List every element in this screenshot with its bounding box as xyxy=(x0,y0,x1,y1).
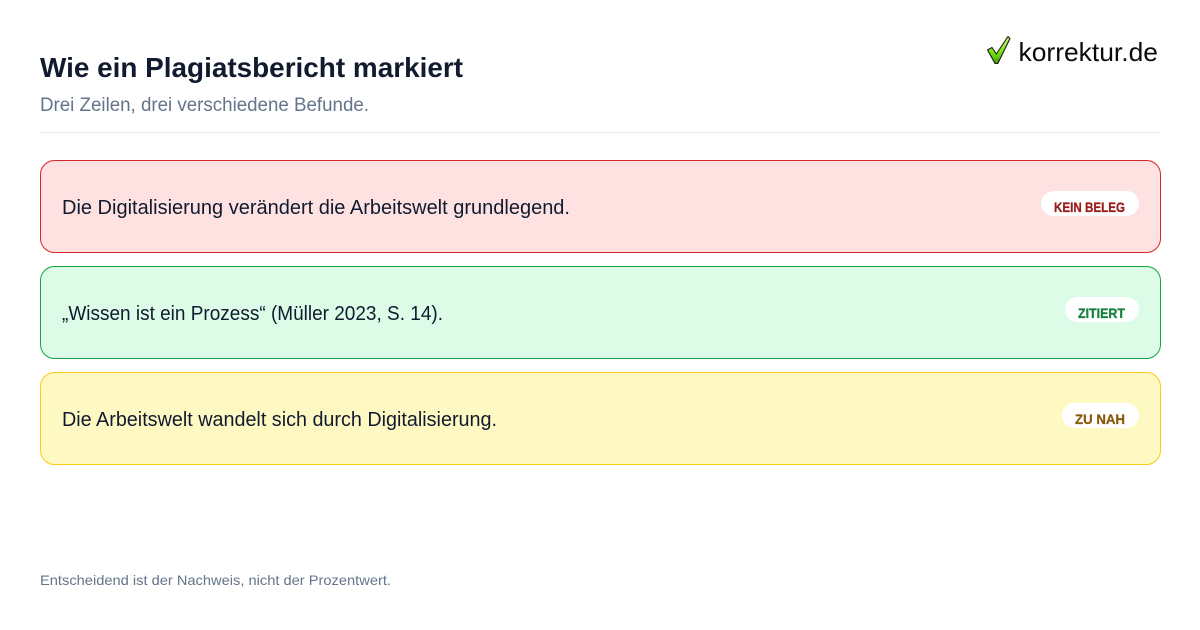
panel: kein Beleg xyxy=(40,160,1160,252)
logo: korrektur.de xyxy=(988,36,1158,67)
panel: zitiert xyxy=(40,266,1160,358)
badge: ZITIERT: ZITIERT xyxy=(1078,305,1125,321)
footer note: Entscheidend ist der Nachweis, nicht der Prozentwert. xyxy=(40,572,391,588)
row text: „Wissen ist ein Prozess“ (Müller 2023, S. 14). xyxy=(62,303,443,325)
icon: green check mark xyxy=(988,36,1010,64)
panel: zu nah xyxy=(40,372,1160,464)
row text: Die Digitalisierung verändert die Arbeitswelt grundlegend. xyxy=(62,197,570,219)
subtitle: Drei Zeilen, drei verschiedene Befunde. xyxy=(40,95,369,116)
logo wordmark: korrektur.de xyxy=(1018,37,1158,67)
badge: KEIN BELEG xyxy=(1041,191,1139,216)
badge: ZU NAH xyxy=(1062,403,1139,428)
badge: ZITIERT xyxy=(1065,297,1139,322)
title: Wie ein Plagiatsbericht markiert xyxy=(40,52,463,83)
badge: ZU NAH: ZU NAH xyxy=(1075,411,1125,427)
badge: KEIN BELEG: KEIN BELEG xyxy=(1054,199,1125,215)
row text: Die Arbeitswelt wandelt sich durch Digitalisierung. xyxy=(62,409,497,431)
